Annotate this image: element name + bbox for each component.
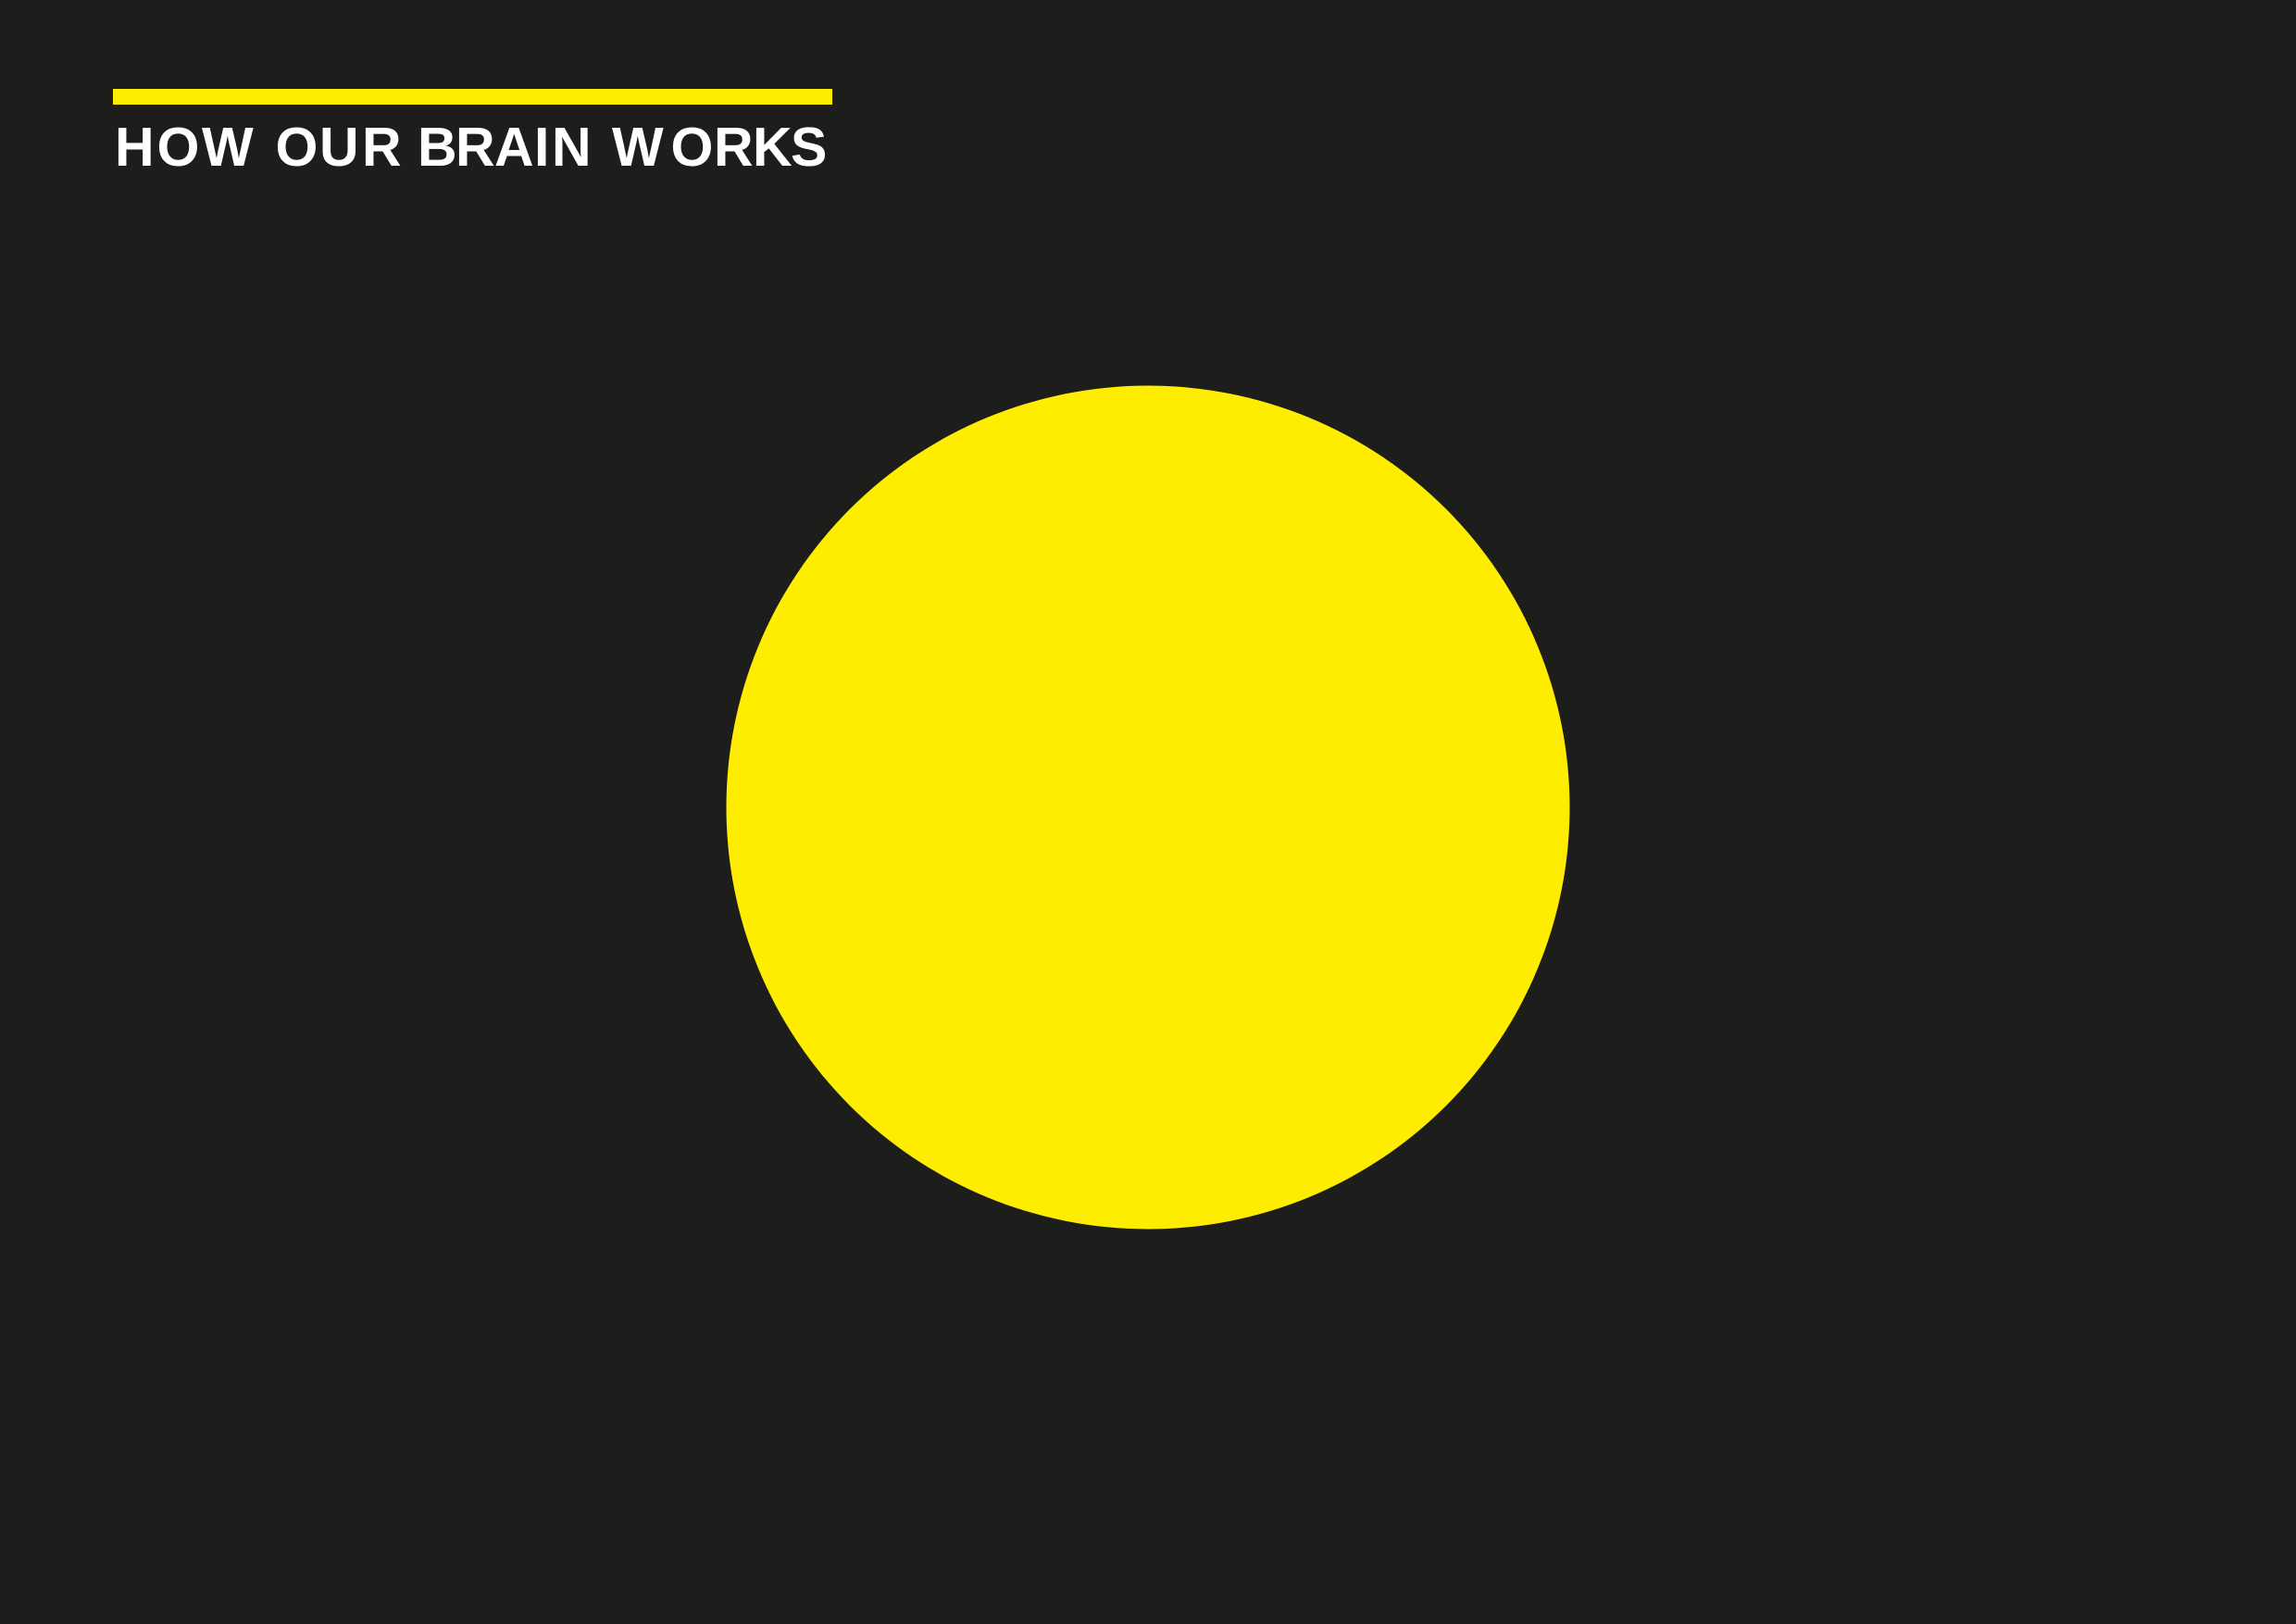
title: HOW OUR BRAIN WORKS [115,117,827,178]
large yellow circle [726,385,1570,1230]
heading accent bar [113,89,832,105]
